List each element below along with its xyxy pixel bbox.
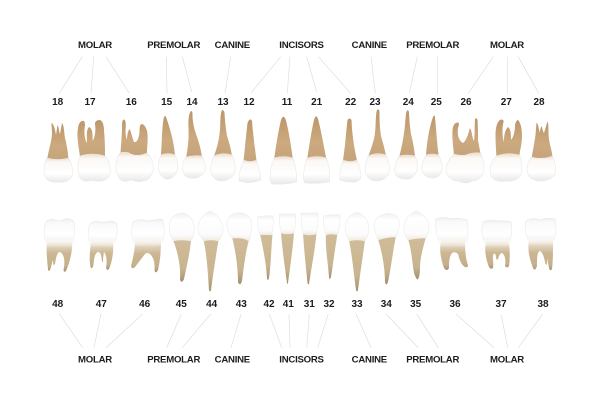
tooth 35 [404,211,429,280]
tooth 31 [301,213,318,284]
tooth 14 [183,111,205,178]
lower tooth numbers: 36 [449,299,461,310]
tooth 41 [279,214,296,284]
top leader lines [59,57,539,93]
top category labels: CANINE [352,40,388,51]
upper tooth numbers: 27 [501,97,512,108]
lower tooth numbers: 44 [206,299,218,310]
tooth 23 [365,109,389,181]
bottom category labels: MOLAR [490,354,524,366]
lower tooth numbers: 46 [139,299,151,310]
bottom category labels: CANINE [352,354,388,366]
upper tooth numbers: 22 [345,97,357,108]
tooth 26 [446,118,484,183]
tooth 11 [270,117,297,184]
top category labels: MOLAR [490,40,524,51]
lower tooth numbers: 38 [537,299,549,310]
top category labels [78,40,524,51]
tooth 16 [116,120,153,182]
top category labels: CANINE [215,40,251,51]
tooth 43 [227,213,252,284]
tooth 45 [169,213,194,282]
lower tooth numbers: 34 [381,299,392,310]
tooth 12 [239,119,261,183]
upper tooth numbers: 25 [431,97,442,108]
upper tooth numbers: 28 [533,97,545,108]
tooth 34 [374,213,399,284]
upper tooth numbers: 16 [126,97,137,108]
upper tooth numbers: 21 [311,97,323,108]
lower tooth numbers: 48 [52,299,64,310]
tooth 44 [198,211,223,292]
tooth 21 [303,116,330,183]
tooth 15 [158,116,178,179]
upper tooth numbers: 14 [186,97,198,108]
upper tooth numbers: 13 [217,97,229,108]
tooth 28 [527,122,556,181]
tooth 46 [131,219,164,272]
tooth 47 [88,221,117,270]
upper tooth numbers: 17 [84,97,96,108]
top category labels: MOLAR [78,40,112,51]
upper tooth numbers: 11 [282,97,293,108]
lower tooth numbers: 31 [304,299,315,310]
upper tooth numbers: 23 [369,97,381,108]
tooth 48 [44,219,74,272]
upper tooth numbers: 24 [403,97,414,108]
bottom category labels: INCISORS [279,354,325,366]
lower tooth numbers: 33 [351,299,363,310]
tooth 27 [490,120,522,181]
lower tooth numbers: 45 [176,299,187,310]
lower tooth numbers: 35 [410,299,422,310]
upper tooth numbers [52,97,545,108]
bottom category labels: MOLAR [78,354,112,366]
tooth 32 [323,215,340,279]
bottom category labels: PREMOLAR [406,354,459,366]
tooth 38 [525,218,556,270]
tooth 25 [422,116,442,178]
tooth 13 [211,110,235,181]
tooth 42 [258,216,273,280]
bottom category labels [78,354,524,366]
tooth 33 [345,212,369,292]
tooth 18 [44,123,73,182]
lower tooth numbers: 32 [323,299,335,310]
bottom leader lines [59,313,543,348]
bottom category labels: PREMOLAR [147,354,200,366]
lower tooth numbers: 47 [96,299,107,310]
lower tooth numbers: 43 [236,299,247,310]
top category labels: PREMOLAR [147,40,200,51]
tooth 37 [482,220,512,269]
upper teeth row [44,109,556,184]
lower tooth numbers: 42 [263,299,275,310]
lower tooth numbers: 41 [283,299,294,310]
tooth 36 [435,218,468,270]
top category labels: PREMOLAR [406,40,459,51]
tooth 22 [340,118,361,182]
tooth 17 [77,120,110,181]
upper tooth numbers: 18 [52,97,64,108]
bottom category labels: CANINE [215,354,251,366]
lower teeth row [44,211,556,292]
upper tooth numbers: 26 [460,97,472,108]
tooth 24 [395,110,417,179]
upper tooth numbers: 12 [243,97,255,108]
lower tooth numbers: 37 [495,299,507,310]
lower tooth numbers [52,299,549,310]
top category labels: INCISORS [279,40,325,51]
upper tooth numbers: 15 [161,97,173,108]
